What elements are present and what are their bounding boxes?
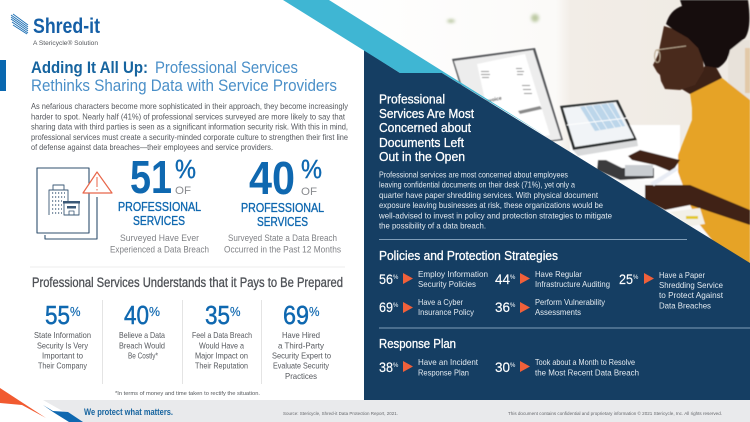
stat column: 55%: 55 <box>45 300 70 330</box>
intro paragraph: As nefarious characters become more sophisticated in their approach, they become increasingly <box>31 101 349 111</box>
stat: 51% of professional services: Experienced a Data Breach <box>110 244 209 254</box>
stat column: 69%: Have Hired <box>282 330 320 340</box>
strategy: 69%: Have a Cyber <box>418 297 463 307</box>
panel paragraph: the possibility of a data breach. <box>379 220 486 230</box>
panel heading: documents left out: Concerned about <box>379 120 471 135</box>
stat column: 69% <box>272 300 331 381</box>
stat column: 35%: Their Reputation <box>195 360 248 370</box>
strategy: 44%: Have Regular <box>535 269 582 279</box>
strategy: 69% <box>379 297 475 317</box>
stat column: 35%: Major Impact on <box>195 350 248 360</box>
logo: Shred-it <box>11 14 100 47</box>
panel heading: documents left out: Professional <box>379 92 445 106</box>
strategy: 44%: 44 <box>495 271 510 287</box>
strategy: 56%: % <box>393 275 399 281</box>
stat: 40% of professional services: OF <box>301 186 317 198</box>
stat column: 69%: a Third-Party <box>278 340 325 350</box>
heading: response plan: Response Plan <box>379 336 456 351</box>
stat column: 55%: Their Company <box>38 360 88 370</box>
stat: 51% of professional services: OF <box>175 185 191 197</box>
stat: 51% of professional services: 51 <box>130 151 172 203</box>
logo: Shred-it: Shred-it <box>33 15 100 38</box>
title: Rethinks Sharing Data with Service Providers <box>31 76 337 95</box>
intro paragraph: professional services must create a security-minded corporate culture to strengthen their first line <box>31 132 348 142</box>
stat: 40% of professional services: SERVICES <box>257 215 308 229</box>
panel paragraph: quarter have paper shredding services. With physical document <box>379 190 599 200</box>
stat: 51% of professional services: SERVICES <box>133 214 185 228</box>
strategy: 25%: % <box>633 275 639 281</box>
accent bar <box>0 60 6 91</box>
panel heading: documents left out: Services Are Most <box>379 106 474 121</box>
strategy: 56%: 56 <box>379 271 393 287</box>
stat column: 69%: Security Expert to <box>272 350 331 360</box>
confidentiality note: This document contains confidential and proprietary information © 2021 Stericycle, Inc. All rights reserved. <box>508 410 722 417</box>
tagline: We protect what matters. <box>84 407 173 418</box>
photo: woman working at desk with documents <box>445 0 750 263</box>
stat column: 69%: 69 <box>283 300 309 330</box>
response: 38%: Have an Incident <box>418 357 479 367</box>
stat column: 55%: % <box>70 304 81 319</box>
stat: 40% of professional services: PROFESSIONAL <box>241 201 324 215</box>
strategy: 25%: to Protect Against <box>659 290 724 300</box>
response: 30%: 30 <box>495 359 510 375</box>
strategy: 25%: Shredding Service <box>659 280 723 290</box>
stat column: 40%: Breach Would <box>119 340 165 350</box>
stat: 51% of professional services: PROFESSIONAL <box>118 200 201 214</box>
stat: 40% of professional services <box>224 152 342 254</box>
intro paragraph: harder to spot. Nearly half (41%) of professional services surveyed are more likely to say that <box>31 112 346 122</box>
strategy: 44% <box>495 269 610 289</box>
response: 38%: 38 <box>379 359 393 375</box>
stat column: 35% <box>192 300 252 370</box>
strategy: 36%: Assessments <box>535 307 581 317</box>
stat: 51% of professional services: % <box>175 154 196 184</box>
response: 30%: % <box>510 363 516 369</box>
stat column: 40%: Be Costly* <box>128 350 159 360</box>
intro paragraph <box>31 101 349 152</box>
panel heading: documents left out: Documents Left <box>379 135 464 150</box>
stat column: 69%: Evaluate Security <box>273 360 330 370</box>
stat column: 55%: Important to <box>42 350 83 360</box>
panel paragraph: leaving confidential documents on their desk (71%), yet only a <box>379 180 575 190</box>
stat column: 40%: Believe a Data <box>119 330 165 340</box>
strategy: 69%: Insurance Policy <box>418 307 475 317</box>
strategy: 69%: % <box>393 303 399 309</box>
photo: woman working at desk with documents: Invoice <box>484 95 502 105</box>
stat column: 69%: Practices <box>285 371 317 381</box>
strategy: 36%: 36 <box>495 299 510 315</box>
stat: 40% of professional services: 40 <box>249 152 295 204</box>
strategy: 44%: Infrastructure Auditing <box>535 279 610 289</box>
strategy: 36%: Perform Vulnerability <box>535 297 606 307</box>
strategy: 56%: Security Policies <box>418 279 476 289</box>
stat column: 55%: State Information <box>34 330 91 340</box>
blue corner accent <box>43 405 83 422</box>
stat column: 69%: % <box>309 304 320 319</box>
response: 30%: Took about a Month to Resolve <box>535 357 635 367</box>
strategy: 25%: Have a Paper <box>659 270 705 280</box>
strategy: 25%: 25 <box>619 271 633 287</box>
panel paragraph <box>378 170 612 230</box>
strategy: 56% <box>379 269 488 289</box>
teal diagonal band <box>283 0 546 136</box>
dark navy panel <box>364 50 750 400</box>
panel paragraph: well-advised to invest in policy and protection strategies to mitigate <box>378 210 612 220</box>
stat column: 40%: 40 <box>124 300 149 330</box>
title: Professional Services <box>155 58 298 77</box>
intro paragraph: sharing data with third parties is seen as a significant information security risk. With this in mind, <box>31 122 348 132</box>
title: Adding It All Up: <box>31 58 148 77</box>
stat: 51% of professional services <box>110 151 209 254</box>
stat column: 35%: Feel a Data Breach <box>192 330 252 340</box>
panel heading: documents left out <box>379 92 474 164</box>
response: 38%: % <box>393 363 399 369</box>
response: 38% <box>379 357 479 378</box>
intro paragraph: of defense against data breaches—their employees and service providers. <box>31 142 273 152</box>
response: 30% <box>495 357 639 378</box>
stat column: 40% <box>119 300 165 360</box>
stat column: 35%: % <box>230 304 241 319</box>
strategy: 56%: Employ Information <box>418 269 488 279</box>
strategy: 25% <box>619 270 724 310</box>
stat: 51% of professional services: Surveyed Have Ever <box>120 233 199 243</box>
logo: Shred-it: A Stericycle® Solution <box>33 39 98 47</box>
strategy: 36% <box>495 297 606 317</box>
stat column: 55%: Security Is Very <box>37 340 89 350</box>
strategy: 25%: Data Breaches <box>659 300 711 310</box>
heading: pays to be prepared: Professional Services Understands that it Pays to Be Prepared <box>32 275 343 290</box>
panel heading: documents left out: Out in the Open <box>379 149 465 164</box>
panel paragraph: Professional services are most concerned about employees <box>379 170 568 180</box>
strategy: 36%: % <box>510 303 516 309</box>
icon: office building with warning triangle <box>37 168 112 239</box>
footer bar <box>43 400 750 422</box>
response: 30%: the Most Recent Data Breach <box>535 368 639 378</box>
strategy: 44%: % <box>510 275 516 281</box>
panel paragraph: exposure leaving businesses at risk, these organizations would be <box>379 200 603 210</box>
stat column: 55% <box>34 300 91 370</box>
stat: 40% of professional services: Surveyed State a Data Breach <box>228 233 337 243</box>
response: 38%: Response Plan <box>418 368 469 378</box>
stat column: 35%: Would Have a <box>199 340 244 350</box>
stat column: 35%: 35 <box>205 300 230 330</box>
stat: 40% of professional services: Occurred in the Past 12 Months <box>224 244 342 254</box>
strategy: 69%: 69 <box>379 299 393 315</box>
orange corner accent <box>0 388 46 418</box>
title <box>31 58 337 95</box>
stat column: 40%: % <box>149 304 160 319</box>
source note: Source: Stericycle, Shred-it Data Protection Report, 2021. <box>283 411 398 417</box>
heading: policies and protection strategies: Policies and Protection Strategies <box>379 248 558 263</box>
stat: 40% of professional services: % <box>301 154 322 184</box>
footnote: *In terms of money and time taken to rectify the situation. <box>115 391 260 397</box>
